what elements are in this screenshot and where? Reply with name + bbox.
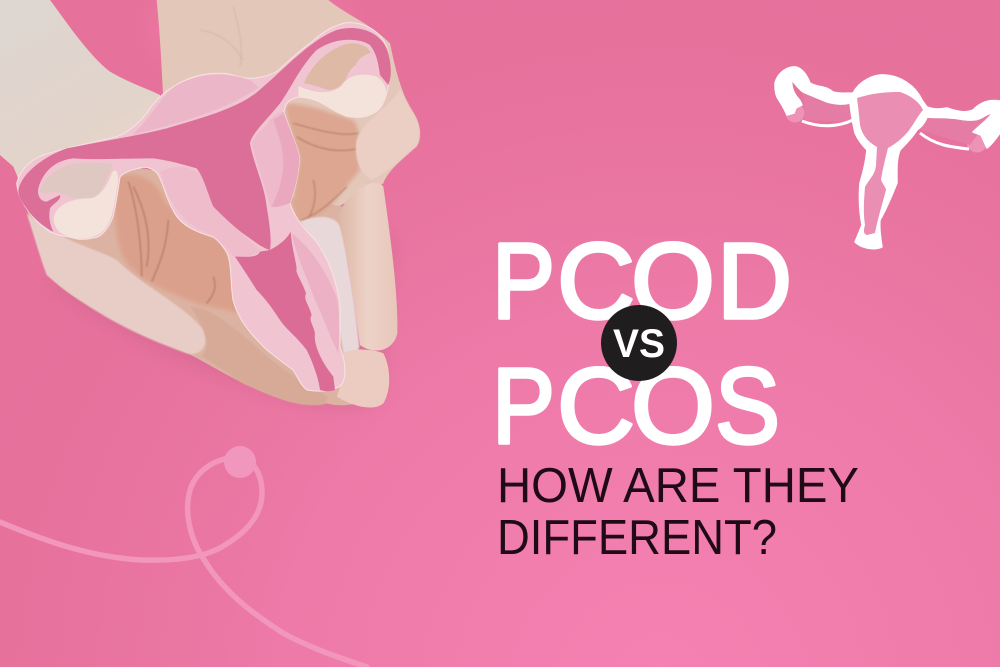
heading: PCOS: S	[715, 345, 780, 466]
dark cavity and tubes	[18, 28, 391, 250]
right lobe darker band	[272, 113, 299, 207]
icon tube tint right	[920, 117, 990, 145]
icon ligament left	[802, 120, 853, 126]
upper palm	[157, 0, 420, 233]
icon: white uterus outline	[775, 67, 1000, 249]
vs badge: VS	[613, 322, 665, 366]
hole left: hand seen through	[39, 163, 113, 199]
palm creases right	[293, 123, 358, 220]
ovary left	[54, 170, 118, 238]
subheading line two: DIFFERENT?	[497, 511, 777, 565]
heading: PCOD: D	[717, 220, 792, 341]
forearm	[0, 0, 167, 240]
long index finger	[338, 183, 397, 351]
heading: PCOD: C	[557, 220, 635, 341]
heading: PCOD	[492, 220, 792, 341]
hole right: hand seen through	[304, 43, 371, 90]
decorative ribbon stethoscope line	[0, 446, 367, 667]
palm hollow right	[286, 103, 360, 223]
title block	[492, 220, 859, 565]
right lobe tint	[252, 112, 299, 207]
hand shadow	[43, 233, 393, 410]
vs badge	[601, 305, 677, 381]
heading: PCOD: O	[631, 220, 715, 341]
heading: PCOD: P	[492, 220, 555, 341]
pale middle finger	[300, 217, 359, 380]
subheading line one: HOW ARE THEY	[497, 459, 859, 513]
lower lobe right tint	[292, 233, 339, 353]
lower hand base	[23, 167, 357, 405]
icon ovary right	[966, 132, 988, 152]
ribbon dot	[224, 446, 256, 478]
lower thumb	[27, 213, 205, 354]
ovary right	[298, 75, 386, 117]
icon uterus cavity	[857, 92, 923, 235]
icon ligament right	[920, 133, 969, 149]
heading: PCOS: P	[492, 345, 555, 466]
photo: hands holding paper uterus	[0, 0, 420, 410]
icon tube tint left	[803, 92, 853, 122]
icon outline	[775, 67, 1000, 249]
upper palm creases	[200, 7, 243, 67]
heading: PCOS: O	[631, 345, 715, 466]
left lower lobe tint	[160, 167, 260, 257]
right thumb joint	[356, 90, 420, 180]
heading: PCOS: C	[557, 345, 635, 466]
lower finger	[190, 307, 328, 405]
heading: PCOS	[492, 345, 780, 466]
lower cavity ruffles	[235, 232, 335, 391]
palm creases left	[128, 182, 215, 303]
icon ovary left	[786, 104, 804, 122]
uterus silhouette	[17, 23, 390, 391]
palm hollow left	[115, 175, 240, 313]
paper uterus cut-out	[17, 23, 391, 391]
bottom fingertip	[337, 349, 389, 408]
upper lobe tint	[132, 75, 258, 135]
